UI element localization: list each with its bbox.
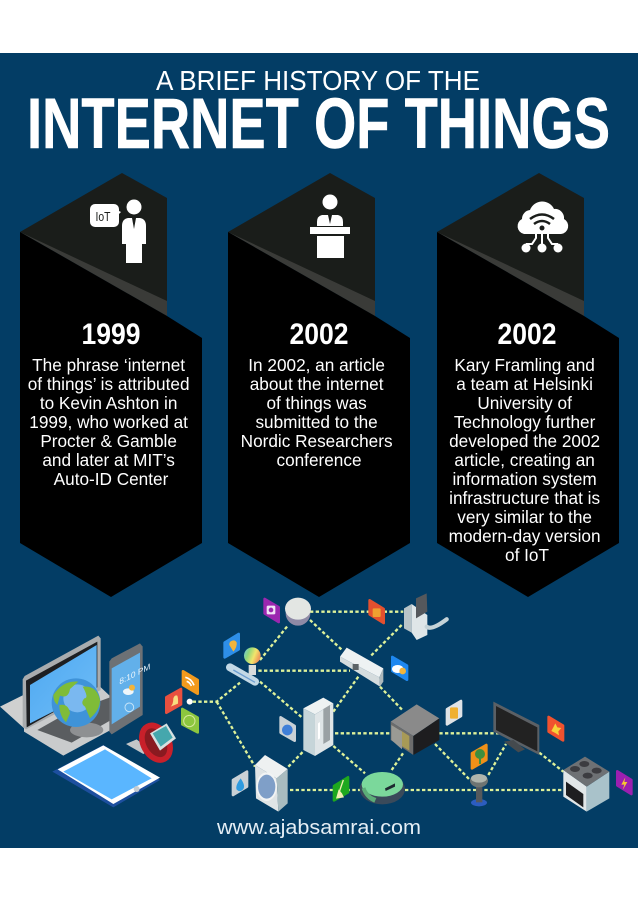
- air conditioner: [340, 648, 383, 687]
- description 1999: Procter & Gamble: [40, 431, 177, 451]
- oven: [563, 757, 609, 812]
- washing machine: [255, 755, 288, 812]
- globe: [52, 678, 100, 727]
- description 2002 Framling: information system: [452, 469, 597, 489]
- description 2002 Framling: Kary Framling and: [454, 355, 595, 375]
- description 1999: Auto-ID Center: [54, 469, 169, 489]
- app icon: light bulb: [225, 634, 239, 657]
- smart door lock: [404, 593, 447, 640]
- app icon: padlock red: [370, 600, 384, 623]
- robot vacuum: [360, 772, 405, 804]
- title line: A brief history of the: A BRIEF HISTORY OF THE: [156, 65, 480, 96]
- panel: 2002 article: [228, 173, 410, 597]
- description 2002 article: In 2002, an article: [248, 355, 385, 375]
- app icon: tree: [472, 745, 486, 768]
- hexagon fold: [20, 232, 167, 316]
- laptop: [0, 636, 111, 756]
- description 2002 article: of things was: [266, 393, 367, 413]
- refrigerator: [303, 698, 333, 756]
- app icon: weather: [392, 657, 407, 680]
- app icon: broom: [334, 777, 348, 800]
- hexagon cap: [437, 173, 584, 316]
- devices right section: [334, 593, 631, 812]
- app icon: star: [549, 717, 563, 740]
- description 1999: to Kevin Ashton in: [40, 393, 177, 413]
- television: [493, 702, 539, 755]
- description 1999: and later at MIT’s: [42, 450, 175, 470]
- panel: 1999: [20, 173, 202, 597]
- year 2002: 2002: [498, 318, 556, 351]
- description 2002 article: conference: [276, 450, 362, 470]
- website address: www.ajabsamrai.com: [216, 816, 421, 839]
- motion sensor: [285, 598, 311, 626]
- hexagon cap: [228, 173, 375, 316]
- smartphone: 8:10 PM: [119, 661, 150, 687]
- icon: person with IoT speech bubble: IoT: [96, 209, 111, 224]
- app icon: wifi: [183, 671, 198, 694]
- device group: light and sensor: [225, 598, 311, 682]
- description 1999: 1999, who worked at: [29, 412, 188, 432]
- description 2002 Framling: developed the 2002: [449, 431, 600, 451]
- app icon: bell: [166, 689, 181, 713]
- network illustration: [0, 593, 631, 812]
- panel: 2002 Framling: [437, 173, 619, 597]
- app icon: lightning: [617, 771, 631, 794]
- app icon: globe: [182, 709, 198, 732]
- app icon: water drop: [233, 772, 247, 795]
- hexagon cap: [20, 173, 167, 316]
- description 1999: The phrase ‘internet: [32, 355, 185, 375]
- app icon: camera: [265, 599, 279, 622]
- smartwatch: [126, 721, 176, 765]
- device group: personal devices: [0, 636, 198, 807]
- year 2002: 2002: [290, 318, 348, 351]
- hexagon body: [20, 232, 202, 597]
- description 2002 Framling: infrastructure that is: [449, 488, 600, 508]
- app icon: padlock grey: [447, 701, 461, 724]
- description 1999: of things’ is attributed: [28, 374, 190, 394]
- icon: speaker at podium: [310, 194, 350, 258]
- safe: [391, 704, 439, 755]
- device group: fridge and washer: [233, 698, 333, 812]
- smart hub lamp: [470, 774, 488, 806]
- hexagon body: [228, 232, 410, 597]
- description 2002 Framling: very similar to the: [457, 507, 592, 527]
- network connection lines: [193, 612, 563, 790]
- smartphone: [109, 643, 150, 734]
- description 2002 Framling: modern-day version: [449, 526, 601, 546]
- description 2002 Framling: article, creating an: [454, 450, 595, 470]
- description 2002 Framling: University of: [477, 393, 572, 413]
- smart bulb: [230, 647, 261, 682]
- hub dot: [187, 699, 193, 705]
- tablet: [52, 745, 160, 807]
- title: [27, 65, 610, 164]
- description 2002 Framling: of IoT: [505, 545, 549, 565]
- hexagon fold: [228, 232, 375, 316]
- description 2002 article: submitted to the: [255, 412, 378, 432]
- description 2002 Framling: a team at Helsinki: [456, 374, 593, 394]
- year 1999: 1999: [82, 318, 140, 351]
- icon: wifi cloud: [518, 201, 568, 252]
- icon: person with IoT speech bubble: [90, 200, 146, 263]
- hexagon fold: [437, 232, 584, 316]
- hexagon body: [437, 232, 619, 597]
- description 2002 Framling: Technology further: [454, 412, 596, 432]
- description 2002 article: Nordic Researchers: [241, 431, 393, 451]
- description 2002 article: about the internet: [250, 374, 384, 394]
- app icon: snowflake: [281, 717, 295, 741]
